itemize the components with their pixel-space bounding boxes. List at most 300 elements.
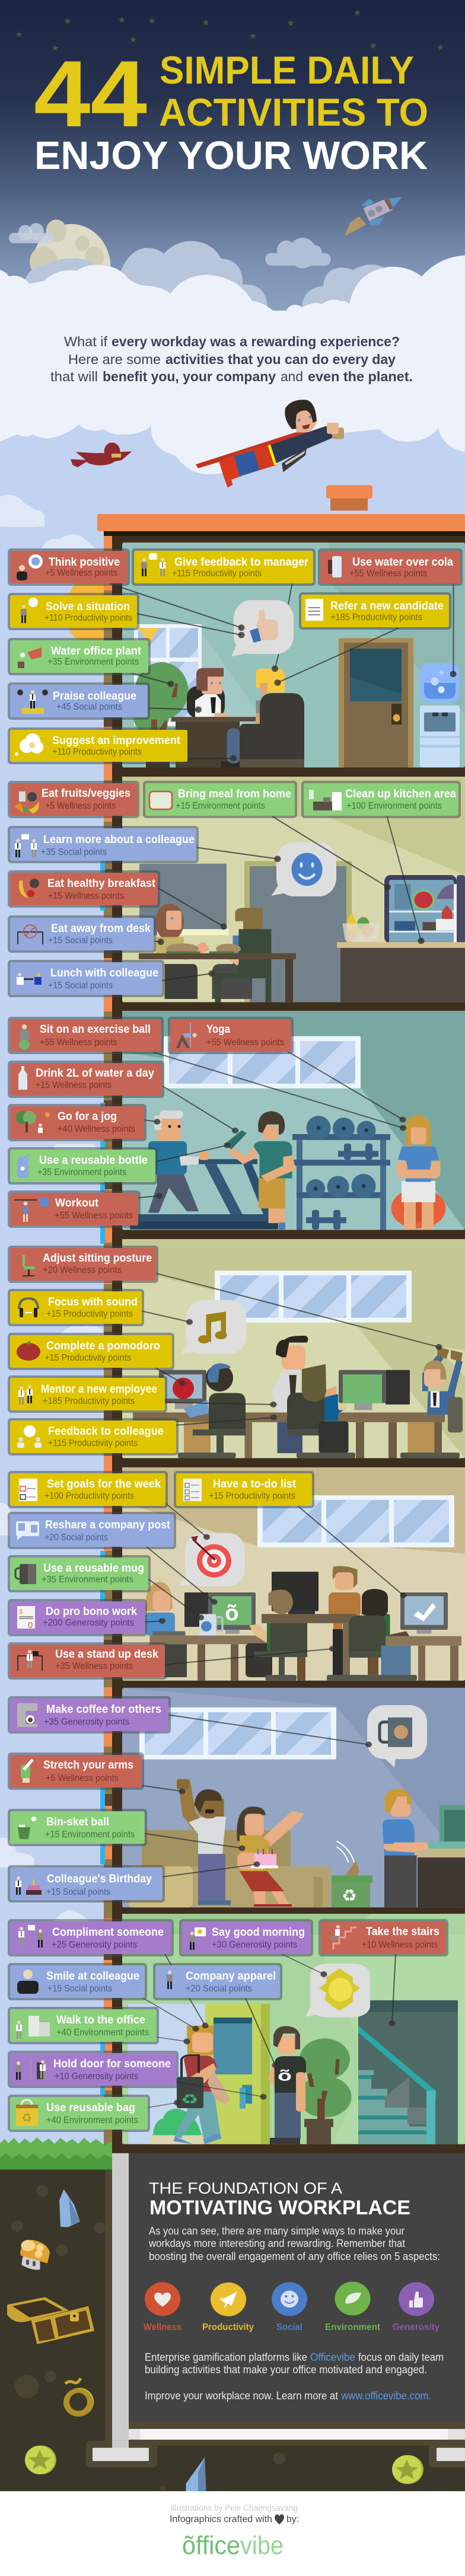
callout: Give feedback to manager: +115 Productivity points [172,569,262,579]
illustrator credit: Illustrations by Pele Chaengsavang [171,2504,298,2513]
callout: Hold door for someone: +10 Generosity points [55,2071,138,2082]
callout: Reshare a company post: +20 Social points [44,1533,108,1543]
woman with bag [173,2026,230,2144]
staircase [358,2000,458,2144]
room 1 wall [122,542,465,767]
callout: Smile at colleague: +15 Social points [47,1984,112,1994]
window [139,1707,336,1760]
roof [97,514,465,531]
weight rack [292,1116,390,1230]
callout: Have a to-do list: Have a to-do list [213,1477,296,1490]
foundation lower band [129,2440,465,2446]
callout: Drink 2L of water a day: Drink 2L of water a day [36,1067,154,1080]
open door [205,2004,270,2144]
callout: Eat healthy breakfast: Eat healthy breakfast [47,877,155,890]
callout: Eat away from desk [8,915,156,953]
callout: Give feedback to manager: Give feedback to manager [174,556,308,569]
gamification paragraph: building activities that make your office motivated and engaged. [145,2364,427,2376]
woman at desk seen from behind [287,1364,355,1458]
callout: Bring meal from home [143,781,297,818]
callout: Workout [8,1190,141,1228]
callout: Take the stairs: Take the stairs [366,1925,439,1938]
callout: Lunch with colleague: +15 Social points [48,981,113,991]
foundation band [129,2422,465,2429]
intro text [50,334,413,384]
callout: Mentor a new employee: +185 Productivity points [43,1396,135,1406]
speech bubble: sun [305,1964,370,2018]
room 7 connector lines [143,1954,396,2108]
room 2 wall [122,777,465,1002]
call to action: Improve your workplace now. Learn more at [145,2390,338,2402]
door [339,638,413,767]
title [34,41,428,178]
pantry doorway [244,861,352,1002]
callout: Do pro bono work: $ [19,1608,23,1616]
icon: mushroom [20,2240,50,2270]
intro text: and [281,369,303,384]
callout: Use reusable bag: +40 Environment points [46,2115,138,2125]
callout: Do pro bono work: 0 [28,1620,33,1630]
callout: Focus with sound [8,1289,144,1326]
callout: Focus with sound: Focus with sound [48,1295,138,1308]
callout: Walk to the office: +40 Environment points [56,2028,149,2038]
icon: social smile [272,2282,307,2316]
soil [0,2169,465,2491]
window [215,1271,412,1323]
right footing [429,2441,465,2468]
speech bubble: thumbs up [231,600,294,656]
callout: Water office plant: +35 Environment points [47,657,139,667]
icon: crystal upper [59,2189,80,2227]
superhero [196,400,344,488]
crafted line end: by: [286,2514,299,2524]
callout: Water office plant: Water office plant [51,644,141,657]
callout: Mentor a new employee: Mentor a new employee [41,1383,157,1396]
building frame [112,531,465,2153]
Officevibe logo: vibe [240,2531,284,2560]
callout: Use a reusable mug: +35 Environment points [42,1575,133,1585]
callout: Refer a new candidate: Refer a new candidate [330,599,444,612]
callout: Focus with sound: +15 Productivity points [46,1309,133,1319]
window [134,624,202,726]
callout: Suggest an improvement: +110 Productivity points [52,747,142,757]
icon: Officevibe ring [63,2378,94,2417]
man in black Officevibe t-shirt: õ [278,2067,292,2085]
callout: Reshare a company post: Reshare a company post [45,1518,170,1531]
icon: heart [275,2514,284,2524]
callout: Bin-sket ball: Bin-sket ball [46,1815,109,1828]
callout: Use reusable bag [8,2095,150,2132]
room 3: gym [122,1011,465,1230]
recycling bin with paper ball: ♻ [342,1886,357,1905]
daylight sky [0,320,465,2176]
callout: Make coffee for others [8,1696,171,1734]
cyan accent bricks [100,861,105,2095]
callout: Mentor a new employee [8,1375,167,1413]
heading line 1: THE FOUNDATION OF A [149,2179,342,2197]
callout: Praise colleague: +45 Social points [56,702,122,712]
treadmill [130,1159,278,1230]
callout: Go for a jog: +40 Wellness points [58,1124,135,1134]
callout: Complete a pomodoro: +15 Productivity points [44,1353,131,1363]
tree [133,662,189,767]
woman with cake [237,1806,304,1907]
table with food [139,943,296,1002]
icon: coin right [392,2455,423,2484]
foundation pillar [112,2153,129,2451]
callout: Compliment someone: Compliment someone [52,1926,164,1939]
callout: Go for a jog [8,1104,146,1141]
man at computer [383,1789,465,1907]
callout: Lunch with colleague: Lunch with colleague [50,966,158,979]
callout: Use a stand up desk: +35 Wellness points [55,1661,133,1671]
callout: Sit on an exercise ball: Sit on an exercise ball [40,1023,151,1036]
small cloud right [266,238,331,269]
room 1: open office [110,542,465,767]
callout: Hold door for someone [8,2051,179,2088]
aspect labels: Environment [325,2322,381,2332]
desk [146,717,260,767]
callout: Sit on an exercise ball: +55 Wellness points [40,1038,117,1048]
page background: sky gradient [0,0,465,332]
callout: Use water over cola: Use water over cola [352,556,453,569]
callout: Stretch your arms [8,1753,144,1790]
speech bubble: coffee mug [367,1705,427,1767]
Officevibe logo [182,2531,284,2560]
room 6: lounge [122,1688,465,1907]
callout: Say good morning: Say good morning [212,1926,305,1939]
room 4: desks [122,1239,465,1458]
moon [30,219,110,311]
room 2: kitchen [122,777,465,1002]
callout: Feedback to colleague [8,1418,179,1455]
room 4 connector lines [142,1273,442,1425]
callout: Solve a situation: +110 Productivity points [44,613,132,623]
left woman [145,1582,175,1636]
title line: simple daily: SIMPLE DAILY [160,48,414,92]
man seen from behind, green shirt [246,1572,319,1681]
Officevibe logo: õffice [182,2531,240,2560]
callout: Praise colleague: Praise colleague [53,690,136,703]
callout: Yoga [168,1017,294,1054]
callout: Company apparel [153,1963,282,2000]
callout: Drink 2L of water a day: +15 Wellness points [36,1080,112,1090]
intro paragraph: boosting the overall engagement of any office relies on 5 aspects: [149,2251,440,2262]
callout: Use water over cola: +55 Wellness points [349,569,427,579]
gamification paragraph: focus on daily team [358,2351,444,2363]
icon: treasure chest [7,2297,94,2344]
grass [0,2137,112,2170]
callout: Use a reusable mug: Use a reusable mug [43,1562,144,1575]
man stretching, grey shirt [177,1779,231,1905]
window [257,1495,454,1547]
callout: Refer a new candidate: +185 Productivity points [330,612,422,623]
callout: Refer a new candidate [299,592,451,630]
callout: Clean up kitchen area [301,781,461,818]
speech bubble: music note [181,1300,246,1354]
callout: Lunch with colleague [8,960,164,997]
callout: Company apparel: +20 Social points [186,1984,252,1994]
callout: Go for a jog: Go for a jog [58,1110,117,1123]
foundation and underground [0,2153,465,2491]
woman eating [155,904,210,999]
gamification paragraph [145,2351,444,2376]
recycling bin with paper ball [332,1841,372,1907]
callout: Adjust sitting posture: Adjust sitting posture [43,1252,152,1265]
speech bubble: target [179,1533,245,1587]
man at desk [187,668,228,718]
callout: Complete a pomodoro: Complete a pomodoro [46,1339,160,1352]
aspect labels: Wellness [144,2322,181,2332]
call to action: www.officevibe.com. [340,2390,431,2402]
aspect labels: Social [276,2322,302,2332]
callout: Take the stairs [319,1919,448,1956]
callout: Water office plant [8,638,151,675]
callout: Eat away from desk: Eat away from desk [51,922,151,935]
sofa [129,1830,331,1907]
callout: Do pro bono work [8,1599,147,1636]
callout: Make coffee for others: Make coffee for others [46,1703,161,1716]
callout: Say good morning: +30 Generosity points [212,1940,297,1950]
callout: Eat healthy breakfast: +15 Wellness points [48,891,124,901]
room 5: team desks [122,1467,465,1681]
chimney [326,485,372,510]
man with headphones [178,1363,246,1458]
callout: Learn more about a colleague [8,826,199,863]
bird [71,443,132,467]
side clouds [0,495,106,1927]
callout: Walk to the office [8,2007,159,2044]
callout: Give feedback to manager [132,548,316,586]
icon: environment leaf [335,2281,370,2315]
icon: crystal lower [186,2457,206,2491]
room 3 wall [122,1011,465,1230]
pale window sill [157,929,229,936]
callout: Suggest an improvement: Suggest an improvement [52,734,180,747]
callout: Set goals for the week: Set goals for the week [47,1477,161,1490]
callout: Smile at colleague: Smile at colleague [46,1969,139,1983]
callout: Walk to the office: Walk to the office [56,2013,145,2026]
callout: Clean up kitchen area: +100 Environment points [346,801,442,811]
fridge [384,875,465,943]
callout: Company apparel: Company apparel [186,1969,276,1983]
callout: Take the stairs: +10 Wellness points [362,1940,438,1950]
man stretching [400,1347,463,1458]
callout: Feedback to colleague: +115 Productivity points [48,1438,138,1448]
plant [298,2038,351,2144]
aspect labels: Generosity [393,2322,439,2332]
desk left [148,1631,268,1681]
colleague in chair, seen from behind [227,669,304,767]
callout: Set goals for the week [8,1471,168,1508]
intro text: benefit you, your company [103,369,276,384]
callout: Make coffee for others: +35 Generosity points [44,1717,129,1727]
callout: Do pro bono work: Do pro bono work [46,1605,137,1618]
footer [170,2504,299,2560]
callout: Drink 2L of water a day [8,1061,164,1098]
stars [15,9,444,51]
callout: Use a reusable bottle: Use a reusable bottle [39,1154,148,1167]
callout: Use water over cola [318,548,463,586]
back clouds [21,241,386,309]
title line: activities to: ACTIVITIES TO [159,90,428,134]
woman with water bottle [225,1111,296,1230]
crafted line: Infographics crafted with [170,2514,272,2524]
room 5 connector lines [145,1504,407,1665]
callout: Bring meal from home: +15 Environment points [176,801,265,811]
aspect labels [144,2322,439,2332]
callout: Bring meal from home: Bring meal from home [178,787,291,800]
callout: Eat away from desk: +15 Social points [48,936,113,946]
intro paragraph: workdays more interesting and rewarding. Remember that [148,2237,405,2249]
basement panel [112,2153,465,2422]
callout: Compliment someone: +25 Generosity points [52,1940,137,1950]
callout: Have a to-do list [174,1471,314,1508]
right monitor with check mark [386,1592,461,1681]
callout: Bin-sket ball: +15 Environment points [45,1830,135,1840]
foundation text panel [144,2179,444,2402]
icon: generosity thumb [399,2282,434,2316]
intro paragraph [148,2225,440,2262]
callout: Think positive [8,548,130,586]
intro text: Here are some [68,352,161,367]
callout: Adjust sitting posture: +20 Wellness points [43,1265,122,1275]
monitors left: õ [225,1601,239,1625]
heading line 2: MOTIVATING WORKPLACE [149,2197,410,2219]
woman doing yoga on exercise ball [391,1116,446,1230]
left footing [86,2441,157,2468]
intro paragraph: As you can see, there are many simple ways to make your [149,2225,405,2237]
callout: Suggest an improvement [8,727,190,764]
room 1 connector lines [110,583,457,761]
callout: Praise colleague [8,682,150,720]
callout: Use a reusable mug [8,1555,151,1592]
white foundation strip [129,2429,465,2440]
callouts [8,548,463,2132]
soil speckles [11,2185,286,2491]
icon: productivity rocket [211,2283,246,2316]
aspect labels: Productivity [202,2322,254,2332]
callout: Use a stand up desk: Use a stand up desk [55,1648,158,1661]
callout: Solve a situation: Solve a situation [46,600,130,613]
callout: Clean up kitchen area: Clean up kitchen area [345,787,456,800]
callout: Use reusable bag: ♻ [21,2112,32,2125]
title line: enjoy your work: ENJOY YOUR WORK [34,133,428,178]
room 6 connector lines [142,1715,372,1877]
room 5 wall [122,1467,465,1681]
callout: Eat fruits/veggies: +5 Wellness points [45,801,116,811]
night sky scene [0,9,465,510]
desk row [133,1412,445,1458]
callout: Colleague's Birthday [8,1865,165,1903]
callout: Hold door for someone: Hold door for someone [53,2057,171,2070]
callout: Learn more about a colleague: Learn more about a colleague [43,833,195,846]
callout: Think positive: Think positive [49,556,120,569]
callout: Eat fruits/veggies [8,781,139,818]
front cloud band [0,256,465,474]
callout: Set goals for the week: +100 Productivity points [44,1491,134,1501]
callout: Sit on an exercise ball [8,1017,164,1054]
callout: Yoga: Yoga [206,1023,230,1036]
callout: Solve a situation [8,593,139,630]
callout: Have a to-do list: +15 Productivity points [209,1491,295,1501]
callout: Colleague's Birthday: Colleague's Birthday [47,1872,152,1885]
callout: Yoga: +55 Wellness points [206,1038,284,1048]
gamification paragraph: Enterprise gamification platforms like [145,2351,307,2363]
green screen monitors [339,1370,410,1410]
fruit bowl [343,913,380,942]
callout: Compliment someone [8,1919,174,1956]
intro text: that will [50,369,98,384]
room 7: entrance [122,1914,465,2144]
callout: Use a reusable bottle [8,1147,158,1185]
grey window panel [139,864,227,936]
callout: Adjust sitting posture [8,1246,158,1283]
kitchen counter [337,942,465,1002]
white mug [199,1614,222,1636]
callout: Use a reusable bottle: +35 Environment points [37,1167,126,1177]
callout: Think positive: +5 Wellness points [45,568,117,578]
callout: Learn more about a colleague: +35 Social points [41,847,107,857]
intro text: What if [64,334,108,349]
standing man [272,1336,308,1453]
water cooler [420,663,460,767]
woman at right, from behind [327,1589,417,1681]
callout: Use a stand up desk [8,1642,167,1680]
gamification paragraph: Officevibe [310,2351,355,2363]
room 4 wall [122,1239,465,1458]
callout: Eat fruits/veggies: Eat fruits/veggies [42,787,130,800]
roof underside shadow [104,531,465,536]
small cloud over moon [9,223,55,243]
intro text: activities that you can do every day [165,352,396,367]
intro text: even the planet. [308,369,413,384]
callout: Eat healthy breakfast [8,870,160,908]
callout: Bin-sket ball [8,1809,147,1846]
icon: coin left [25,2446,56,2474]
callout: Stretch your arms: +5 Wellness points [46,1773,119,1783]
outside view through entrance [128,2004,205,2144]
sun behind building [65,572,139,651]
man eating [212,908,272,1002]
callout: Colleague's Birthday: +15 Social points [46,1887,110,1897]
brick column [104,531,112,2150]
room 2 connector lines [154,816,425,981]
rocket [345,197,402,236]
window [164,1036,361,1089]
title number 44: 44 [34,41,147,146]
man in black Officevibe t-shirt [268,2026,306,2144]
icon: wellness heart [145,2282,180,2316]
callout: Reshare a company post [8,1512,176,1549]
room 7 wall [122,1914,465,2144]
callout: Do pro bono work: +200 Generosity points [43,1618,134,1628]
callout: Use reusable bag: Use reusable bag [46,2101,135,2114]
callout: Smile at colleague [8,1963,147,2000]
callout: Workout: Workout [55,1196,98,1209]
callout: Complete a pomodoro [8,1333,174,1370]
room 6 wall [122,1688,465,1907]
callout: Workout: +55 Wellness points [55,1211,133,1221]
callout: Stretch your arms: Stretch your arms [43,1758,133,1771]
speech bubble: smiley [272,842,336,896]
callout: Feedback to colleague: Feedback to colleague [48,1425,164,1438]
callout: Say good morning [179,1919,313,1956]
man at far desk [262,1566,361,1681]
woman with bag: ♻ [181,2092,199,2107]
older man on treadmill [148,1110,209,1213]
foundation side wall [105,2169,112,2444]
